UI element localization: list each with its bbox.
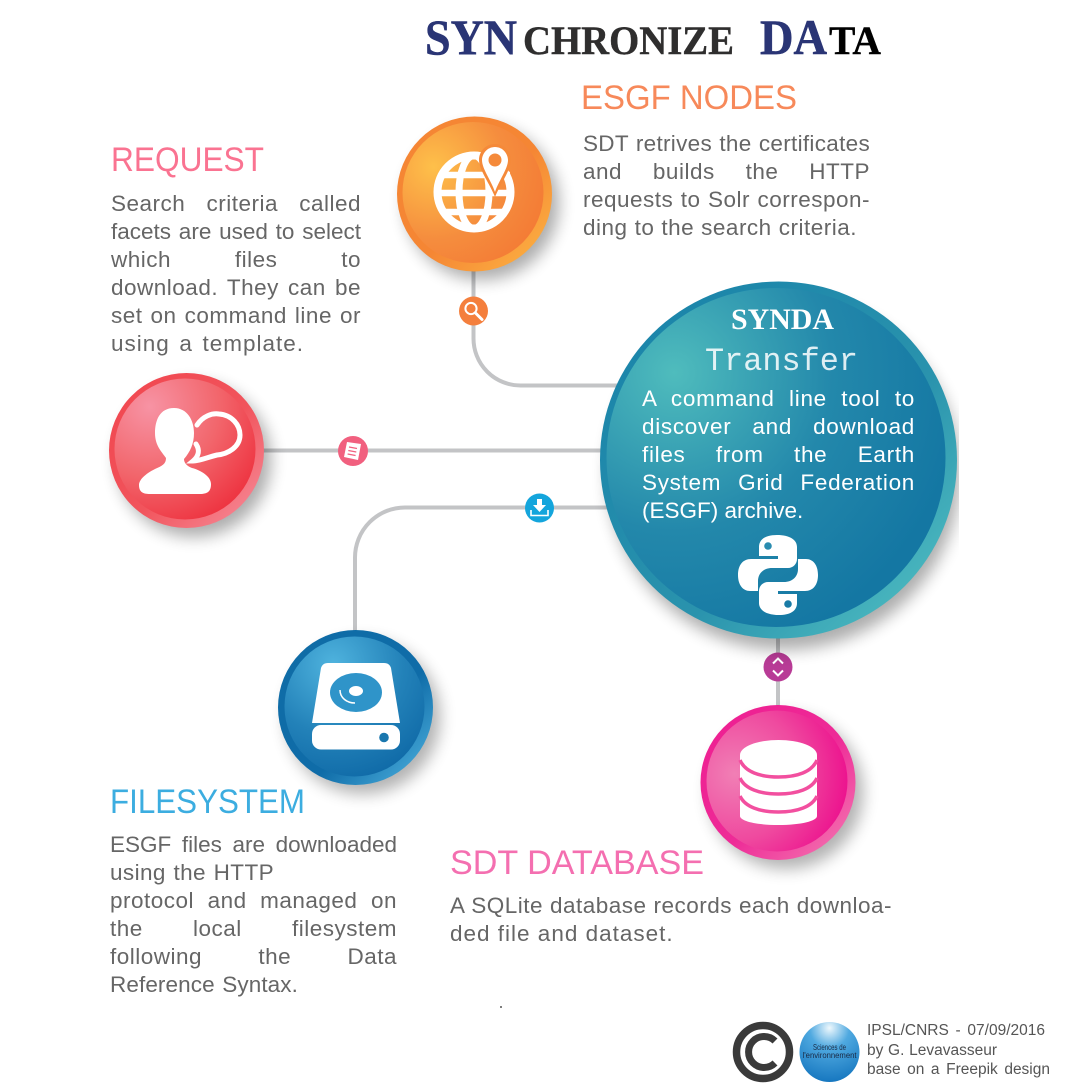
icon: globe with pin — [438, 144, 511, 228]
text: filesystem description: using the HTTP — [110, 860, 274, 885]
text: Synda description: discover and download — [642, 414, 915, 439]
text: Synda description: (ESGF) archive. — [642, 498, 803, 523]
circle: request — [109, 373, 271, 537]
text: filesystem description: the local filesystem — [110, 916, 397, 941]
text: ESGF nodes description — [583, 131, 870, 240]
title: DA — [760, 9, 827, 65]
text: Synda description — [642, 386, 915, 523]
text: Synda description: files from the Earth — [642, 442, 915, 467]
node icon: up and down arrows — [764, 652, 792, 682]
text: filesystem description: Reference Syntax. — [110, 972, 298, 997]
text: Synda description: A command line tool to — [642, 386, 915, 411]
node icon: download — [525, 494, 554, 522]
heading: ESGF nodes: ESGF NODES — [581, 79, 797, 117]
text: request description: facets are used to select — [111, 219, 361, 244]
text: request description — [111, 191, 361, 356]
text: filesystem description: following the Data — [110, 944, 397, 969]
heading: SDT database: SDT DATABASE — [450, 844, 704, 882]
circle: Synda Transfer — [600, 280, 1019, 680]
text: SDT database description: ded file and dataset. — [450, 921, 674, 946]
icon: python logo — [738, 535, 818, 615]
heading: request: REQUEST — [111, 141, 264, 179]
circle: filesystem — [278, 630, 440, 794]
connector: filesystem to Synda — [355, 508, 620, 632]
text: request description: using a template. — [111, 331, 304, 356]
text: filesystem description — [110, 832, 397, 997]
logo: Sciences de l'environnement: Sciences de — [813, 1042, 846, 1052]
text: request description: which files to — [111, 247, 361, 272]
icon: hard drive — [312, 663, 400, 750]
title: TA — [829, 18, 881, 63]
connector: ESGF nodes to Synda — [473, 268, 620, 386]
circle: ESGF nodes — [397, 116, 559, 280]
title — [425, 9, 881, 65]
text: ESGF nodes description: requests to Solr correspon- — [583, 187, 870, 212]
text: SDT database description: A SQLite database records each downloa- — [450, 893, 892, 918]
text: ESGF nodes description: ding to the search criteria. — [583, 215, 857, 240]
connector: request to Synda — [262, 448, 620, 452]
connector: Synda to database — [776, 630, 780, 708]
text: credits: base on a Freepik design — [867, 1061, 1050, 1078]
title: CHRONIZE — [523, 18, 734, 63]
icon: database cylinder — [740, 740, 817, 825]
circle: SDT database — [700, 705, 863, 869]
node icon: document — [338, 436, 368, 466]
text: ESGF nodes description: SDT retrives the certificates — [583, 131, 870, 156]
text: request description: set on command line or — [111, 303, 361, 328]
text: request description: Search criteria called — [111, 191, 361, 216]
logo: Sciences de l'environnement — [800, 1022, 860, 1082]
label: SYNDA: SYNDA — [731, 303, 834, 336]
text: filesystem description: ESGF files are downloaded — [110, 832, 397, 857]
stray dot — [500, 1006, 502, 1008]
text: credits: IPSL/CNRS - 07/09/2016 — [867, 1022, 1045, 1039]
text: ESGF nodes description: and builds the HTTP — [583, 159, 870, 184]
text: SDT database description — [450, 893, 892, 946]
text: credits — [867, 1022, 1050, 1078]
heading: filesystem: FILESYSTEM — [110, 783, 305, 821]
icon: copyright — [736, 1026, 790, 1078]
text: request description: download. They can be — [111, 275, 361, 300]
node icon: search — [459, 296, 488, 326]
text: credits: by G. Levavasseur — [867, 1042, 997, 1058]
title: SYN — [425, 9, 517, 65]
icon: person with speech bubble — [139, 408, 240, 494]
logo: Sciences de l'environnement: l'environnement — [802, 1050, 857, 1060]
text: Synda description: System Grid Federation — [642, 470, 915, 495]
text: filesystem description: protocol and managed on — [110, 888, 397, 913]
label: Transfer: Transfer — [705, 343, 858, 380]
